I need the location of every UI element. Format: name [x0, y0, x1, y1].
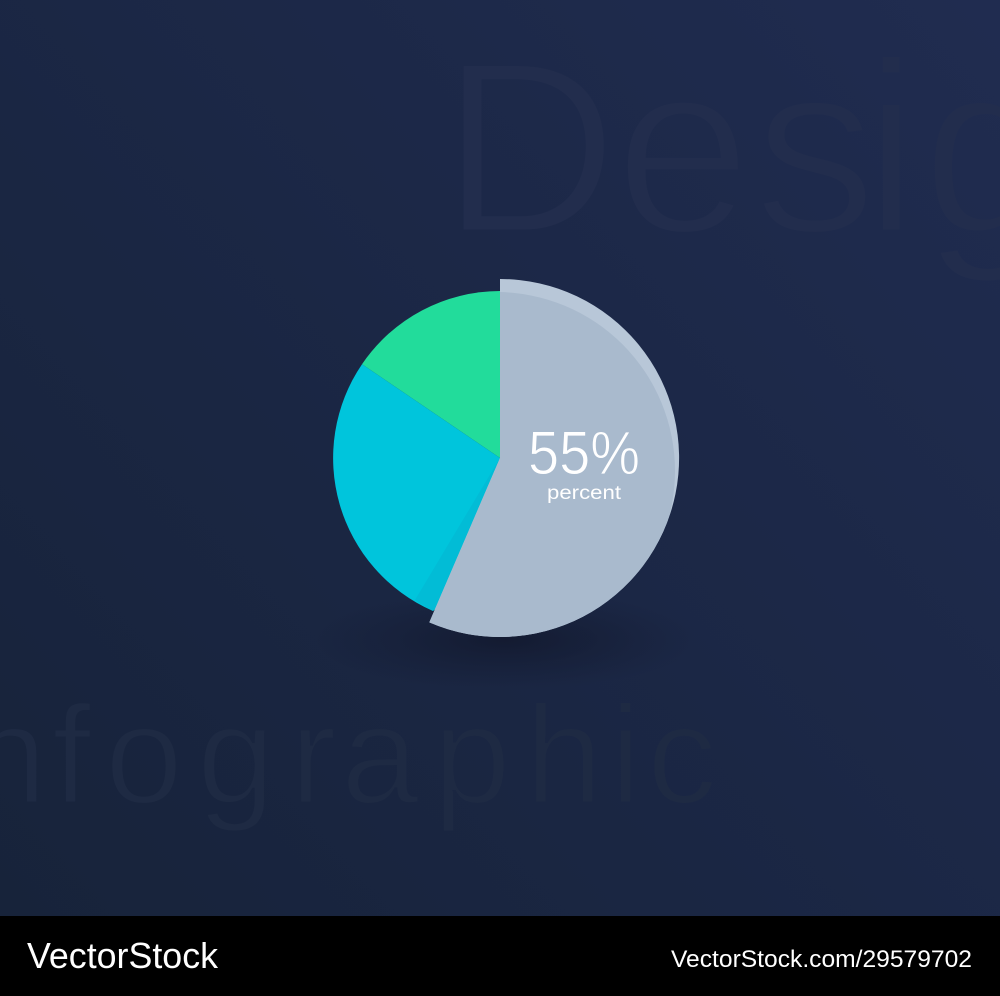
footer logo text: VectorStock: [27, 935, 219, 976]
slice shadow on cyan segment: [415, 458, 500, 611]
value label: 55%: 55%: [528, 419, 640, 487]
footer bar: [0, 916, 1000, 996]
grey segment main face: [429, 292, 675, 637]
pie drop shadow: [315, 590, 695, 690]
footer image id: VectorStock.com/29579702: [671, 946, 972, 973]
slice: grey 55 percent segment: [429, 279, 679, 637]
slice: cyan segment: [333, 364, 500, 611]
pie chart: [317, 279, 679, 650]
slice: green segment: [362, 291, 500, 458]
caption: percent: percent: [547, 483, 622, 504]
